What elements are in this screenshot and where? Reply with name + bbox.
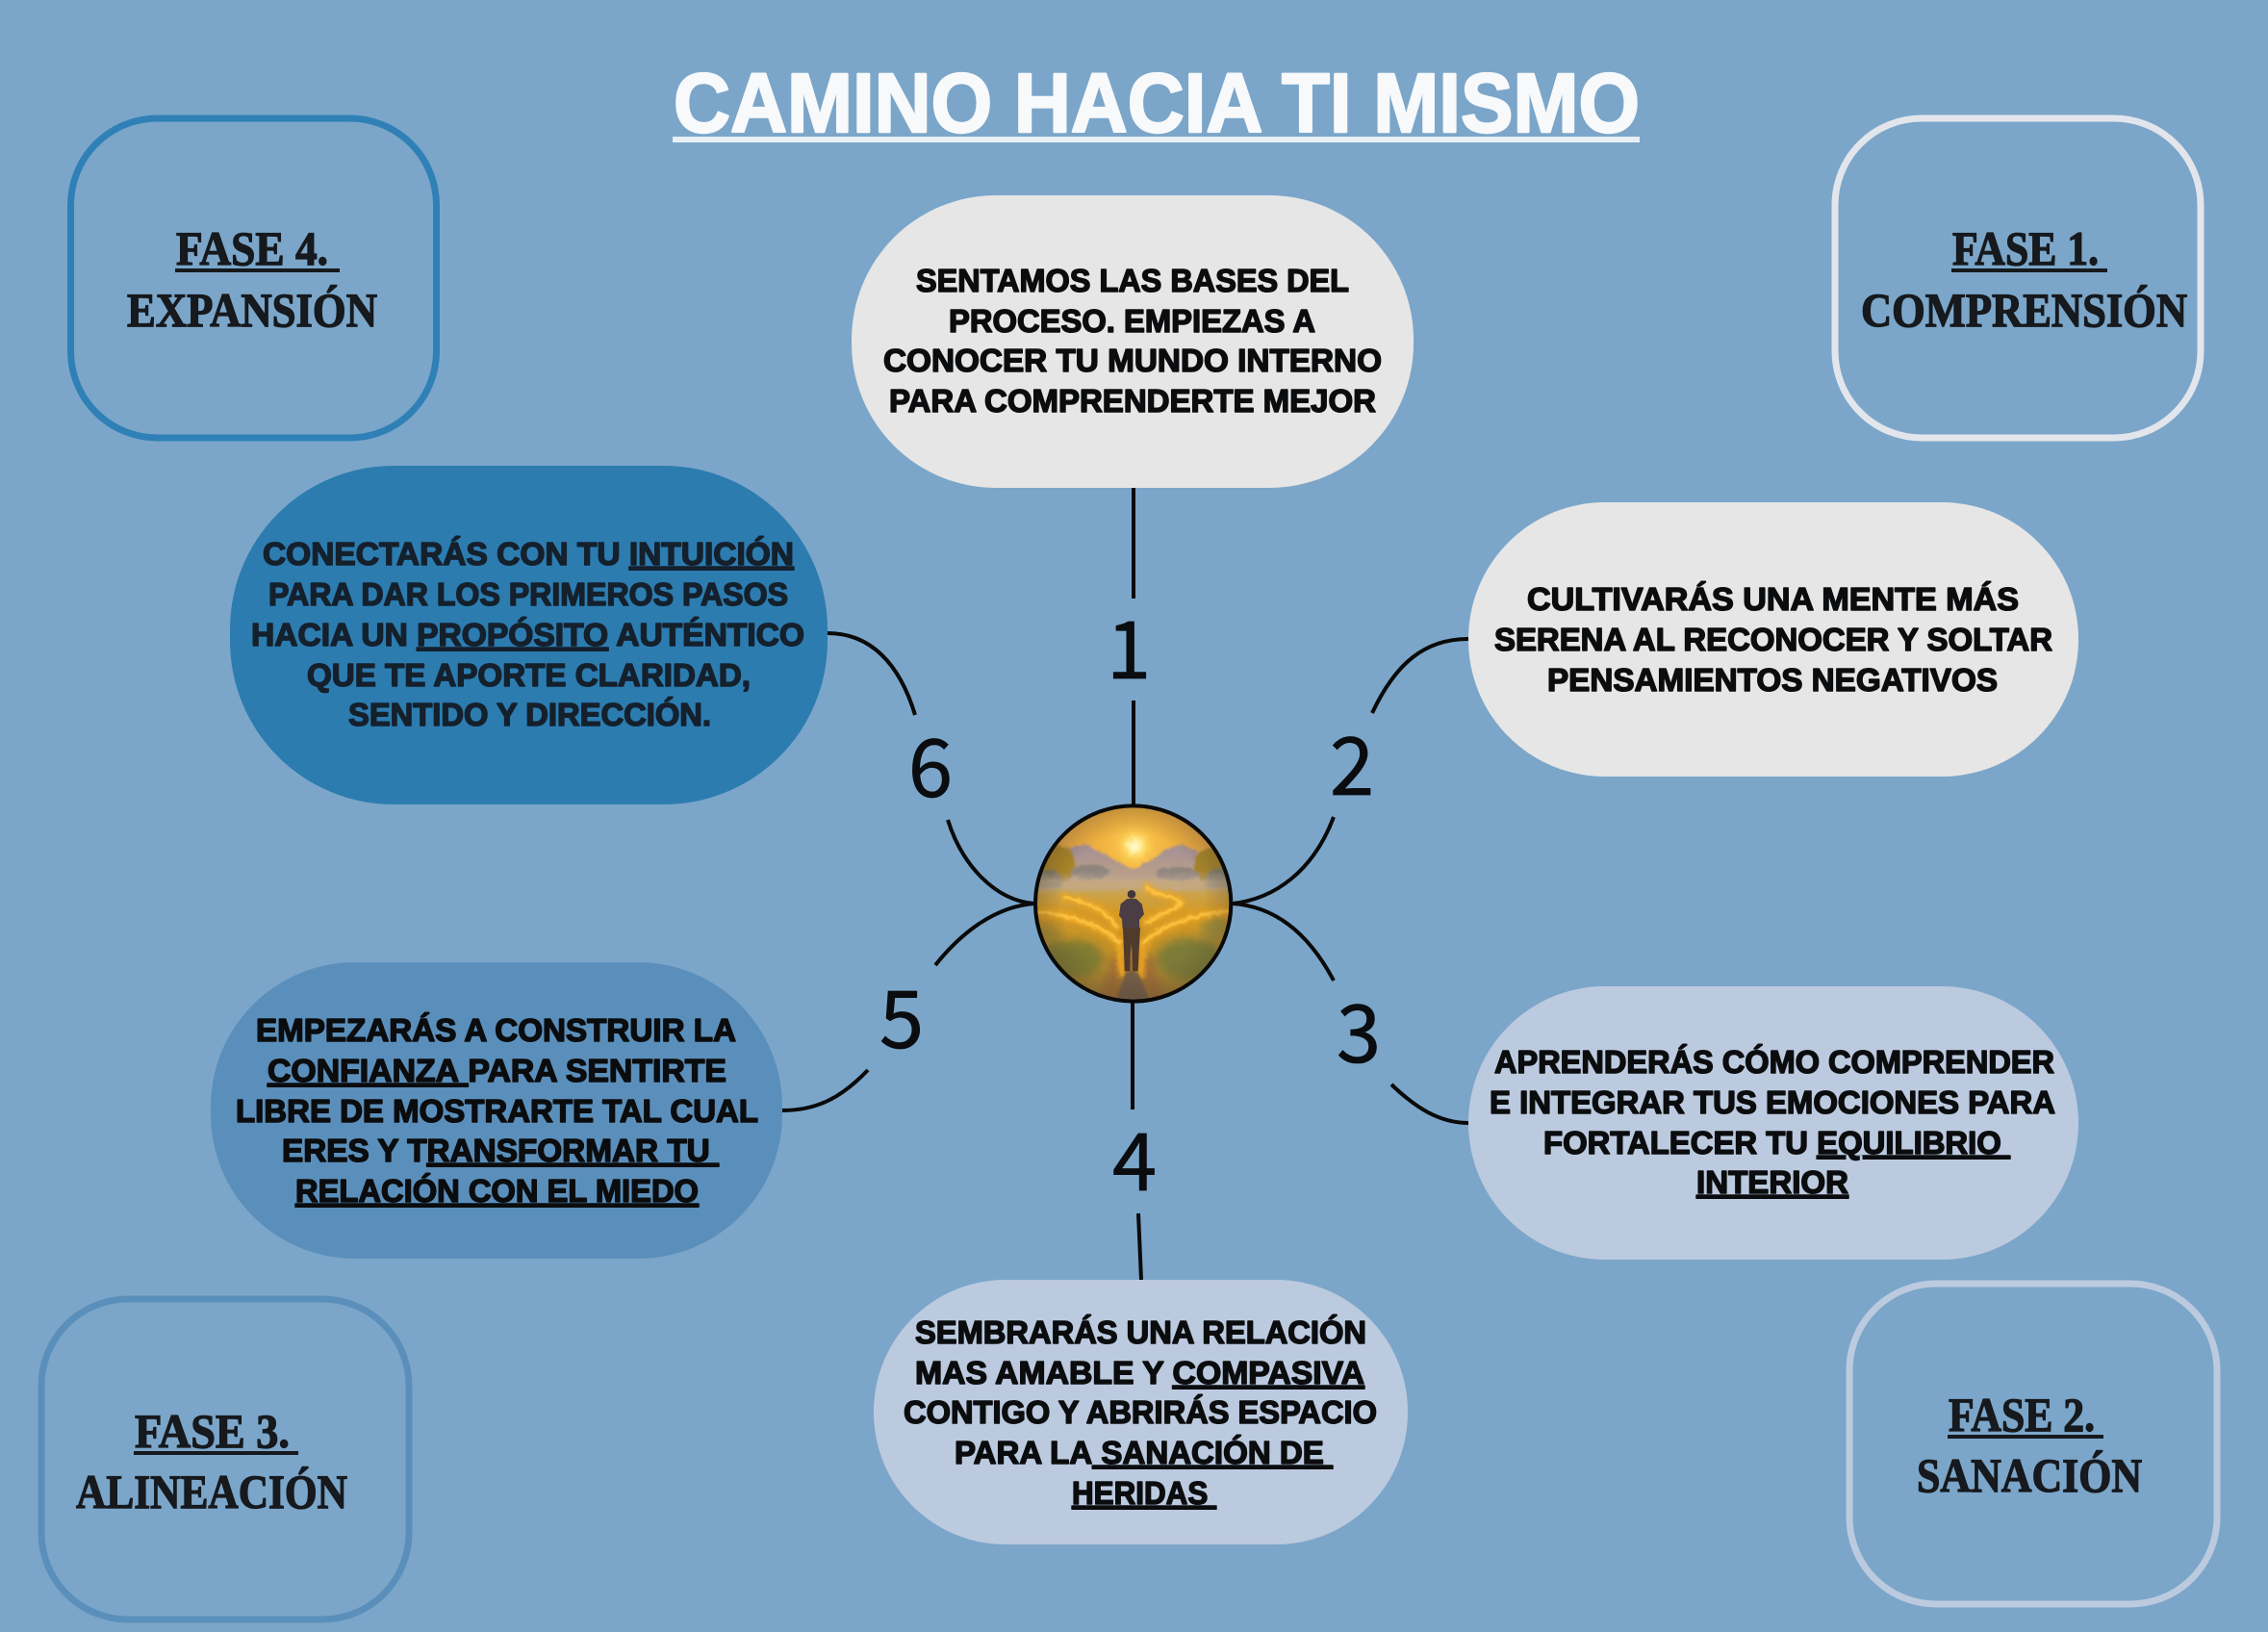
panel: bubble 5: ERES Y TRANSFORMAR TU [282, 1133, 719, 1168]
number 6: 6 [908, 704, 953, 820]
connector: line 5 [782, 904, 1034, 1110]
central illustration: person at crossroads at sunrise [1030, 799, 1238, 1006]
mountains [1068, 842, 1201, 881]
panel: bubble 4: CONTIGO Y ABRIRÁS ESPACIO [904, 1394, 1377, 1430]
number 3: 3 [1337, 970, 1381, 1085]
panel: bubble 2: SERENA AL RECONOCER Y SOLTAR [1494, 622, 2052, 657]
panel: bubble 3: FORTALECER TU EQUILIBRIO [1543, 1125, 2010, 1160]
panel: bubble 2: PENSAMIENTOS NEGATIVOS [1547, 662, 1998, 698]
panel: fase 3: FASE 3. [135, 1404, 290, 1458]
number 5: 5 [879, 956, 924, 1071]
panel: bubble 4 [874, 1280, 1408, 1544]
glowing paths [1038, 887, 1229, 975]
panel: fase 4 [71, 118, 437, 438]
panel: bubble 6: QUE TE APORTE CLARIDAD, [307, 657, 751, 693]
field [1037, 887, 1230, 998]
connector: line 3 [1233, 904, 1468, 1123]
panel: fase 3 [41, 1299, 409, 1619]
panel: bubble 1: SENTAMOS LAS BASES DEL [916, 263, 1349, 298]
panel: bubble 2 [1468, 502, 2078, 777]
person [1119, 890, 1144, 971]
number 4: 4 [1112, 1098, 1157, 1213]
panel: bubble 1 [852, 195, 1414, 488]
number 2: 2 [1330, 702, 1374, 818]
panel: fase 4: FASE 4. [176, 221, 328, 275]
panel: fase 1: FASE 1. [1952, 221, 2099, 275]
panel: bubble 6: HACIA UN PROPÓSITO AUTÉNTICO [251, 617, 804, 652]
panel: bubble 6: CONECTARÁS CON TU INTUICIÓN [263, 536, 794, 572]
panel: bubble 2: CULTIVARÁS UNA MENTE MÁS [1527, 581, 2019, 617]
panel: bubble 6: SENTIDO Y DIRECCIÓN. [348, 697, 711, 732]
panel: bubble 6: PARA DAR LOS PRIMEROS PASOS [268, 576, 788, 612]
panel: bubble 5: LIBRE DE MOSTRARTE TAL CUAL [236, 1093, 758, 1129]
connector: line 6 [828, 633, 1034, 904]
mist and trees [1039, 844, 1228, 889]
panel: bubble 5: CONFIANZA PARA SENTIRTE [268, 1053, 726, 1088]
panel: bubble 5 [211, 962, 782, 1259]
connector: line 2 [1233, 639, 1468, 904]
panel: fase 1: COMPRENSIÓN [1861, 283, 2187, 337]
panel: bubble 3: APRENDERÁS CÓMO COMPRENDER [1494, 1044, 2054, 1080]
panel: fase 2: SANACIÓN [1917, 1448, 2142, 1502]
panel: bubble 3: INTERIOR [1696, 1164, 1848, 1200]
panel: fase 3: ALINEACIÓN [76, 1465, 347, 1518]
panel: bubble 4: SEMBRARÁS UNA RELACIÓN [915, 1314, 1366, 1350]
panel: fase 1 [1835, 118, 2201, 438]
shadow [1115, 972, 1150, 1001]
panel: bubble 6 [230, 466, 828, 804]
panel: bubble 5: EMPEZARÁS A CONSTRUIR LA [256, 1012, 736, 1048]
number 1: 1 [1107, 586, 1151, 701]
panel: bubble 5: RELACIÓN CON EL MIEDO [295, 1173, 699, 1209]
panel: bubble 3: E INTEGRAR TUS EMOCIONES PARA [1490, 1084, 2055, 1120]
panel: bubble 4: HERIDAS [1072, 1475, 1216, 1511]
panel: bubble 4: MAS AMABLE Y COMPASIVA [915, 1355, 1364, 1390]
panel: bubble 4: PARA LA SANACIÓN DE [955, 1435, 1333, 1470]
panel: fase 2 [1849, 1284, 2217, 1604]
title: CAMINO HACIA TI MISMO [674, 57, 1640, 150]
sky [1057, 807, 1212, 890]
panel: bubble 3 [1468, 986, 2078, 1260]
panel: bubble 1: PARA COMPRENDERTE MEJOR [889, 383, 1376, 419]
panel: fase 4: EXPANSIÓN [127, 283, 377, 337]
panel: bubble 1: PROCESO. EMPIEZAS A [949, 303, 1315, 339]
connector: line 4 [1133, 1001, 1141, 1280]
panel: fase 2: FASE 2. [1949, 1388, 2095, 1441]
panel: bubble 1: CONOCER TU MUNDO INTERNO [883, 343, 1382, 378]
connector: line 1 [1132, 488, 1135, 806]
